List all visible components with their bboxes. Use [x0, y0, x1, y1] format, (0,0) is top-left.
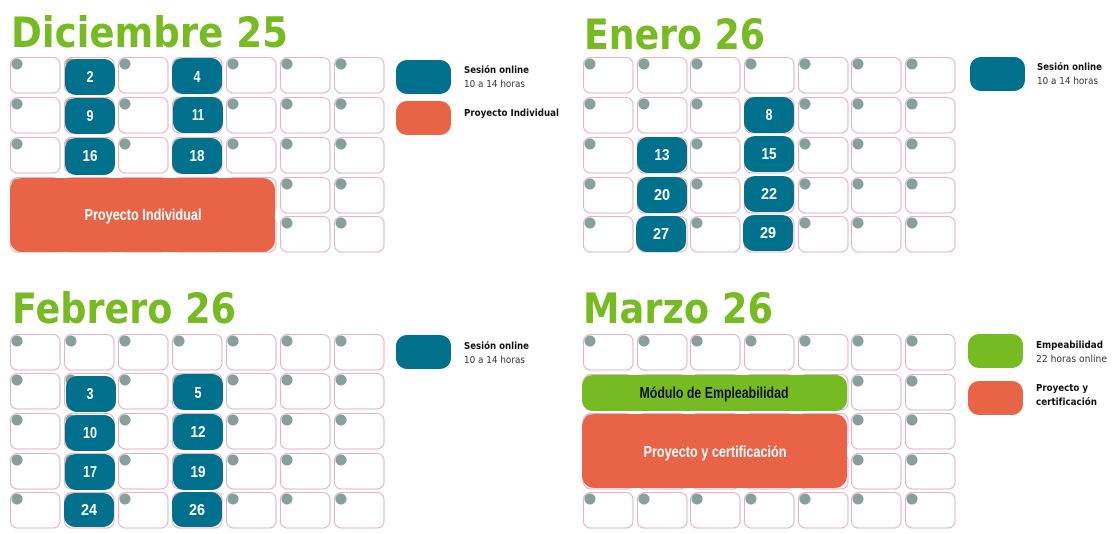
panel: Marzo 26 — [582, 284, 1107, 528]
session days: enero: 20 — [654, 187, 670, 204]
calendar grid: marzo — [584, 334, 955, 528]
title: Diciembre 25: Diciembre 25 — [11, 8, 288, 57]
session days: febrero: 3 — [86, 386, 94, 403]
session days: febrero: 12 — [190, 424, 206, 441]
session days: diciembre: 2 — [86, 69, 94, 86]
session days: enero: 22 — [761, 186, 777, 203]
legend: diciembre: 10 a 14 horas — [464, 79, 525, 90]
legend: enero: 10 a 14 horas — [1037, 76, 1098, 87]
session days: diciembre: 18 — [190, 148, 205, 165]
calendar grid: enero — [584, 58, 955, 252]
block: Proyecto y certificación: Proyecto y certificación — [644, 444, 786, 461]
block: Módulo de Empleabilidad: Módulo de Empleabilidad — [640, 385, 788, 402]
panel: Enero 26 — [584, 10, 1102, 252]
legend: enero: Sesión online — [1037, 61, 1102, 73]
calendar grid: diciembre — [10, 58, 384, 252]
legend: febrero: 10 a 14 horas — [464, 355, 525, 366]
session days: febrero: 5 — [194, 385, 202, 402]
session days: febrero: 19 — [190, 464, 206, 481]
block: Proyecto Individual — [10, 178, 275, 252]
title: Enero 26: Enero 26 — [584, 10, 765, 59]
block: Proyecto y certificación — [582, 414, 847, 488]
session days: febrero: 17 — [83, 464, 97, 481]
legend: diciembre — [396, 60, 559, 135]
legend: diciembre: Sesión online — [464, 64, 529, 76]
session days: febrero: 26 — [189, 502, 205, 519]
calendar grid: febrero — [10, 334, 384, 528]
session days: enero: 13 — [654, 147, 670, 164]
session days: diciembre: 11 — [192, 107, 204, 124]
legend: marzo: Proyecto y — [1036, 383, 1088, 394]
panel: Febrero 26 — [10, 284, 529, 528]
legend: marzo: Empeabilidad — [1036, 340, 1103, 351]
legend: marzo — [968, 334, 1107, 415]
session days: enero: 27 — [653, 226, 669, 243]
session days: enero: 15 — [762, 146, 777, 163]
legend: diciembre: Proyecto Individual — [464, 108, 559, 119]
title: Marzo 26: Marzo 26 — [583, 284, 773, 333]
title: Febrero 26: Febrero 26 — [12, 284, 236, 333]
block: Módulo de Empleabilidad — [582, 375, 847, 411]
legend: marzo: certificación — [1036, 396, 1097, 408]
legend: febrero — [396, 335, 529, 369]
panel: Diciembre 25 — [10, 8, 559, 252]
legend: marzo: 22 horas online — [1036, 354, 1107, 365]
legend: febrero: Sesión online — [464, 340, 529, 352]
session days: febrero: 24 — [81, 502, 97, 519]
session days: diciembre: 16 — [82, 148, 98, 165]
session days: enero: 29 — [760, 225, 776, 242]
session days: febrero — [64, 374, 223, 527]
session days: enero — [636, 97, 794, 252]
legend: enero — [970, 57, 1102, 91]
session days: diciembre — [65, 58, 223, 175]
session days: enero: 8 — [766, 107, 773, 124]
block: Proyecto Individual: Proyecto Individual — [84, 207, 202, 224]
session days: diciembre: 4 — [194, 69, 201, 86]
session days: diciembre: 9 — [86, 108, 94, 125]
session days: febrero: 10 — [83, 425, 97, 442]
